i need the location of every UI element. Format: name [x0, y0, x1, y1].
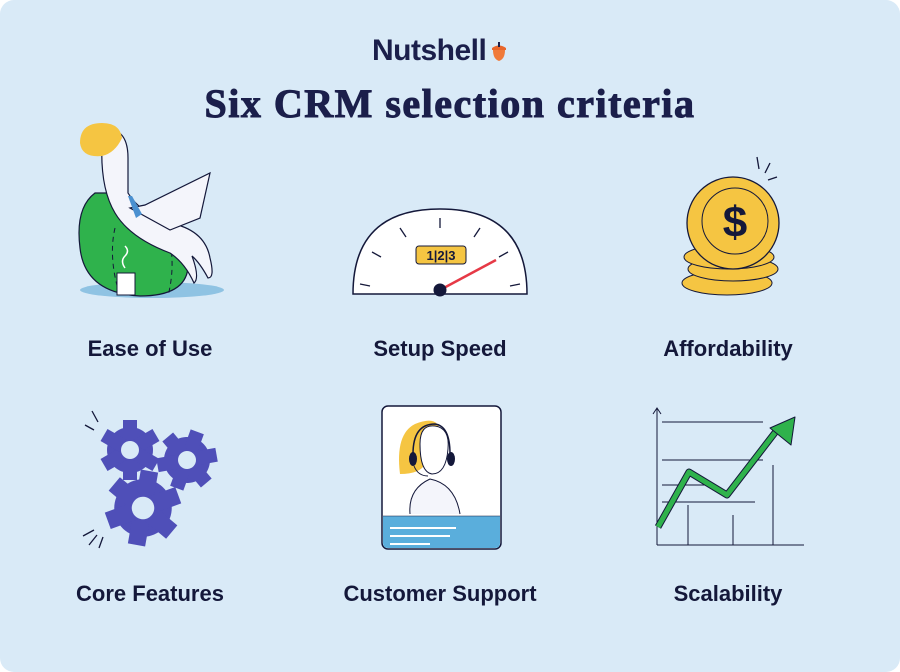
label: affordability: Affordability — [663, 336, 793, 361]
icon: person on beanbag — [78, 123, 224, 298]
icon: gears — [82, 410, 218, 548]
logo: Nutshell — [372, 34, 486, 67]
icon: coins: $ — [723, 198, 747, 247]
label: customer support: Customer Support — [343, 581, 537, 606]
label: scalability: Scalability — [674, 581, 782, 606]
icon: speedometer — [352, 208, 528, 296]
icon: speedometer: 1|2|3 — [427, 248, 455, 263]
label: core features: Core Features — [76, 581, 224, 606]
icon: growth chart — [652, 407, 804, 546]
label: setup speed: Setup Speed — [373, 336, 507, 361]
title: Six CRM selection criteria — [204, 81, 696, 126]
icon: coins — [682, 156, 780, 296]
icon: customer support card — [381, 405, 502, 550]
label: ease of use: Ease of Use — [88, 336, 212, 361]
